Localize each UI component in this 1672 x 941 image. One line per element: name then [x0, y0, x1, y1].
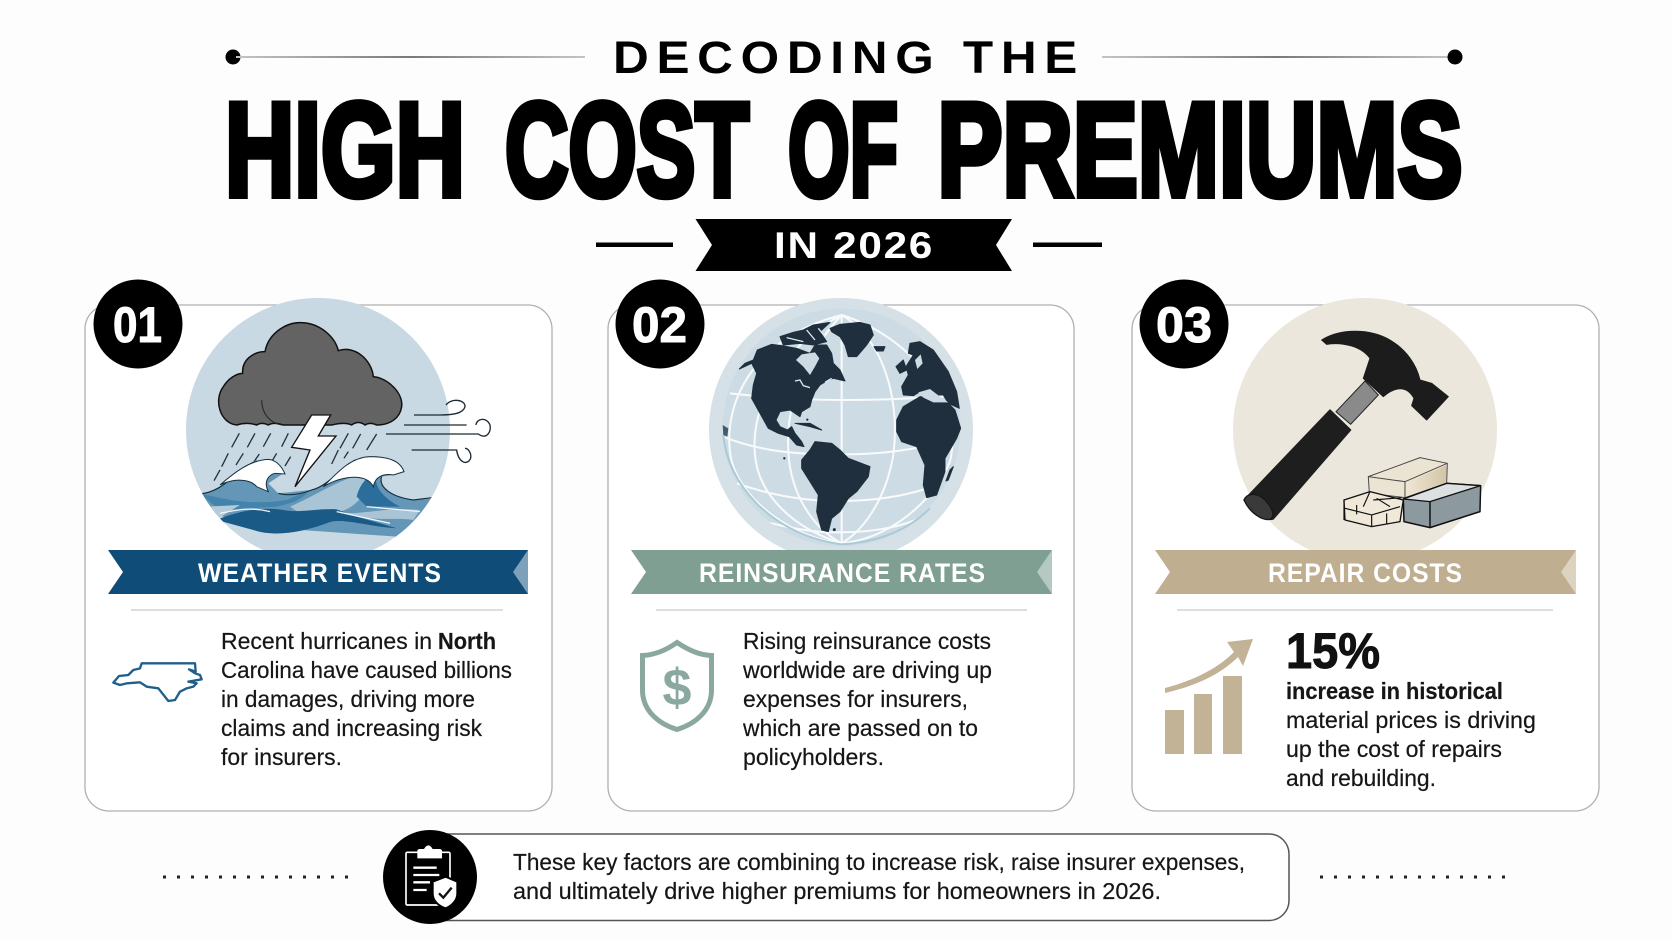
dotted rule left [163, 876, 350, 878]
dotted rule right [1320, 876, 1512, 878]
badge: 02 [616, 280, 704, 368]
icon: north carolina outline [113, 663, 202, 701]
icon: clipboard with shield [383, 830, 477, 924]
text: reinsurance description: Rising reinsurance costs [743, 628, 991, 654]
ribbon: reinsurance rates [631, 550, 1052, 594]
ribbon: reinsurance rates: REINSURANCE RATES [699, 558, 986, 588]
heading: high cost of premiums: PREMIUMS [938, 76, 1462, 224]
text: reinsurance description: policyholders. [743, 744, 884, 770]
illustration: storm over waves [186, 298, 490, 562]
callout text: and ultimately drive higher premiums for homeowners in 2026. [513, 878, 1161, 904]
icon: wind gusts [386, 400, 490, 462]
text: weather events description: claims and increasing risk [221, 715, 482, 741]
icon: storm cloud [219, 323, 402, 425]
badge: 01: 01 [113, 297, 162, 353]
callout box [425, 834, 1289, 920]
badge: 01 [94, 280, 182, 368]
text: reinsurance description [742, 628, 992, 770]
callout text [513, 849, 1245, 904]
card outline [1132, 305, 1599, 811]
text: weather events description [221, 628, 512, 770]
icon: rain [214, 433, 377, 481]
footer callout [163, 830, 1512, 924]
callout text: These key factors are combining to increase risk, raise insurer expenses, [513, 849, 1245, 875]
text: repair costs description [1286, 678, 1536, 791]
icon: rising bar chart [1165, 639, 1253, 754]
text: weather events description: for insurers. [221, 744, 342, 770]
text: weather events description: North [438, 628, 496, 654]
title rule left [226, 50, 585, 64]
text: repair costs description: and rebuilding. [1286, 765, 1436, 791]
stat: 15%: 15% [1286, 623, 1380, 679]
title block [225, 32, 1462, 271]
text: repair costs description: up the cost of repairs [1286, 736, 1502, 762]
text: reinsurance description: worldwide are driving up [742, 657, 992, 683]
text: reinsurance description: which are passed on to [742, 715, 978, 741]
icon: ocean waves [200, 457, 437, 537]
ribbon: repair costs [1155, 550, 1576, 594]
text: weather events description: in damages, driving more [221, 686, 475, 712]
heading: high cost of premiums: COST [505, 76, 749, 224]
ribbon: weather events [108, 550, 528, 594]
text: weather events description: Carolina have caused billions [221, 657, 512, 683]
text: repair costs description: increase in historical [1286, 678, 1503, 704]
ribbon: weather events: WEATHER EVENTS [198, 558, 442, 588]
text: weather events description: Recent hurricanes in [221, 628, 432, 654]
title rule right [1102, 50, 1462, 64]
ribbon: repair costs: REPAIR COSTS [1268, 558, 1463, 588]
icon: hammer [1244, 331, 1448, 519]
continents [723, 322, 961, 532]
subtitle ribbon: in 2026: IN 2026 [774, 225, 934, 266]
card outline [85, 305, 552, 811]
globe glass limb [723, 435, 930, 544]
icon: wave crest right [323, 457, 404, 487]
badge: 02: 02 [632, 297, 687, 353]
illustration: globe [709, 298, 973, 562]
badge: 03 [1140, 280, 1228, 368]
text: reinsurance description: expenses for insurers, [743, 686, 968, 712]
lakes and seas [796, 352, 948, 402]
heading: high cost of premiums: HIGH [225, 76, 465, 224]
heading: high cost of premiums [225, 76, 1462, 224]
text: repair costs description: material prices is driving [1286, 707, 1536, 733]
panel: reinsurance rates [608, 280, 1074, 811]
heading: decoding the: DECODING THE [613, 32, 1085, 83]
heading: high cost of premiums: OF [788, 76, 898, 224]
panel: weather events [85, 280, 552, 811]
panel: repair costs [1132, 280, 1599, 811]
globe grid [723, 315, 957, 543]
icon: lightning bolt [292, 415, 336, 487]
badge: 03: 03 [1156, 297, 1212, 353]
icon: dollar shield [642, 642, 712, 730]
card outline [608, 305, 1074, 811]
icon: wave crest left [220, 459, 285, 492]
icon: dollar shield: $ [663, 659, 692, 717]
illustration: hammer and materials [1233, 298, 1497, 562]
lakes and arctic gaps [787, 328, 832, 388]
subtitle ribbon: in 2026 [596, 219, 1102, 271]
icon: stacked materials [1344, 458, 1481, 528]
